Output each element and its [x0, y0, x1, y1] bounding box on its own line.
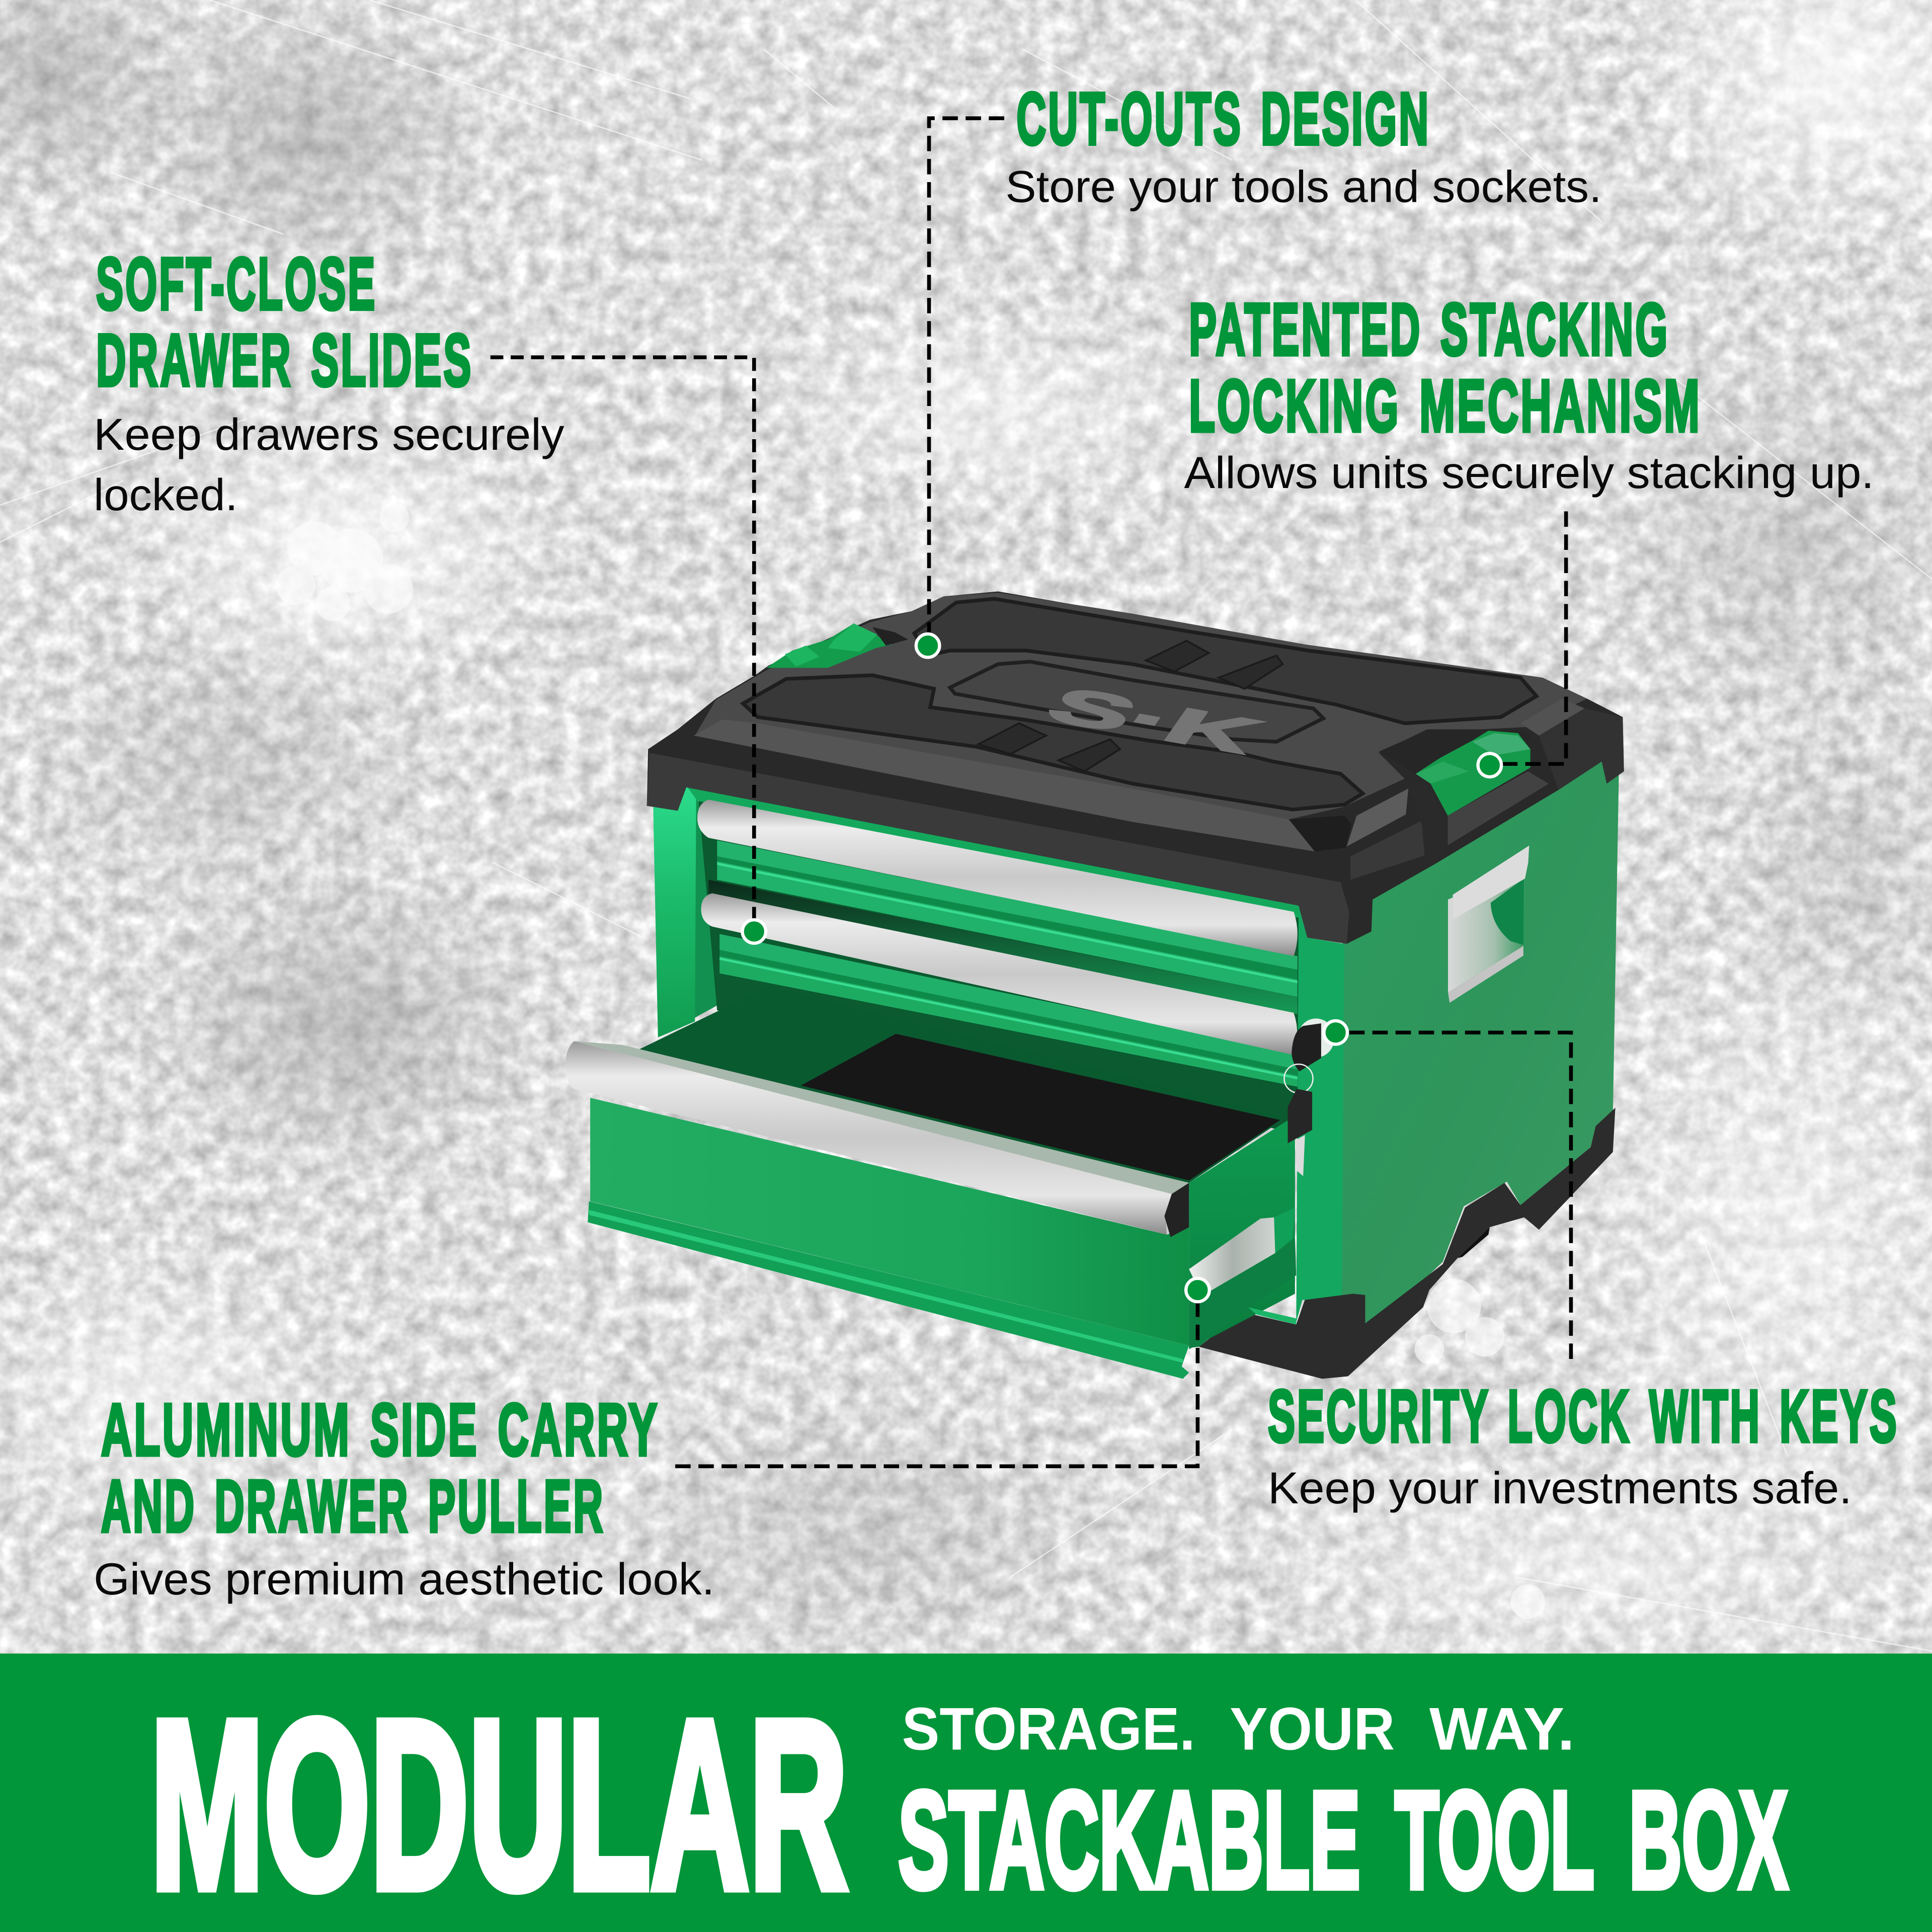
- lid: top surface: [695, 593, 1587, 851]
- heading: patented stacking locking mechanism: [1189, 288, 1702, 447]
- marker dot: security lock: [1324, 1021, 1347, 1044]
- drawer 1 face: [717, 840, 1298, 997]
- base: black bumper: [1199, 1108, 1616, 1379]
- heading: soft-close drawer slides: [96, 243, 473, 402]
- latch: right: [1416, 731, 1531, 816]
- text: stacking description: Allows units securely stacking up.: [1184, 447, 1874, 498]
- side carry handle cut-out: [1448, 846, 1529, 1003]
- top green rail: [688, 787, 1300, 918]
- marker dot: cut-outs: [916, 634, 939, 658]
- open drawer: [566, 974, 1298, 1379]
- lid: black outer shell: [647, 592, 1624, 944]
- heading: soft-close drawer slides: SOFT-CLOSE: [96, 243, 377, 326]
- lid: finger grooves: [978, 640, 1282, 771]
- callout leader: aluminum handle: [675, 1301, 1197, 1466]
- marker dot: stacking lock: [1478, 754, 1501, 777]
- marker dot: drawer slides: [743, 920, 766, 943]
- callout leader: cut-outs design: [929, 118, 1004, 634]
- heading: soft-close drawer slides: DRAWER SLIDES: [96, 319, 473, 402]
- lid: front-left slope strip: [694, 719, 1315, 851]
- banner subtitle: TOOL: [1395, 1763, 1594, 1917]
- callout leader: soft-close drawer slides: [491, 357, 754, 922]
- banner tagline: STORAGE.: [902, 1696, 1195, 1763]
- tool box product illustration: [566, 592, 1624, 1379]
- drawer slide: [1189, 1208, 1296, 1348]
- front right strip: [1296, 906, 1344, 1322]
- drawer 2 face: [719, 934, 1298, 1087]
- text: aluminum description: Gives premium aesthetic look.: [94, 1554, 714, 1604]
- marker dot: aluminum handle: [1186, 1278, 1210, 1302]
- banner subtitle: BOX: [1629, 1763, 1788, 1917]
- text: soft-close description: Keep drawers securely: [94, 409, 565, 459]
- callout leader: stacking lock: [1501, 511, 1566, 764]
- lock and keys: [1284, 1018, 1334, 1176]
- banner subtitle: STACKABLE: [898, 1763, 1360, 1917]
- lid logo: S·K: S·K: [1035, 677, 1272, 763]
- box: left frame: [653, 786, 697, 1037]
- text: security description: Keep your investments safe.: [1268, 1463, 1852, 1513]
- heading: aluminum side carry and drawer puller: AND DRAWER PULLER: [101, 1465, 605, 1548]
- handle: top drawer: [697, 799, 1298, 956]
- handle: middle drawer: [701, 894, 1297, 1055]
- right side panel: [1342, 739, 1619, 1323]
- heading: aluminum side carry and drawer puller: [101, 1389, 659, 1548]
- bottom banner: [0, 1654, 1932, 1932]
- latch: left: [766, 623, 908, 668]
- banner tagline: [902, 1696, 1575, 1763]
- lid: front recess panel: [743, 675, 1363, 810]
- lid: center plateau: [950, 662, 1323, 742]
- banner title: MODULAR: MODULAR: [150, 1671, 848, 1932]
- box: inner left shadow strip: [695, 797, 717, 1018]
- lid: corner facets: [1289, 699, 1624, 880]
- banner tagline: YOUR: [1230, 1696, 1395, 1763]
- callout leader: security lock: [1349, 1032, 1571, 1361]
- text: soft-close description: locked.: [94, 469, 238, 520]
- box: dark interior behind drawers: [697, 788, 1301, 1134]
- dark gap between drawers: [708, 880, 1298, 1014]
- lid: rear recess panel: [914, 599, 1537, 723]
- heading: aluminum side carry and drawer puller: ALUMINUM SIDE CARRY: [101, 1389, 659, 1471]
- heading: cut-outs design: CUT-OUTS DESIGN: [1016, 78, 1430, 160]
- text: cut-outs description: Store your tools and sockets.: [1005, 162, 1602, 212]
- lid: front band: [647, 753, 1349, 944]
- banner tagline: WAY.: [1429, 1696, 1575, 1763]
- text: soft-close description: [94, 409, 565, 520]
